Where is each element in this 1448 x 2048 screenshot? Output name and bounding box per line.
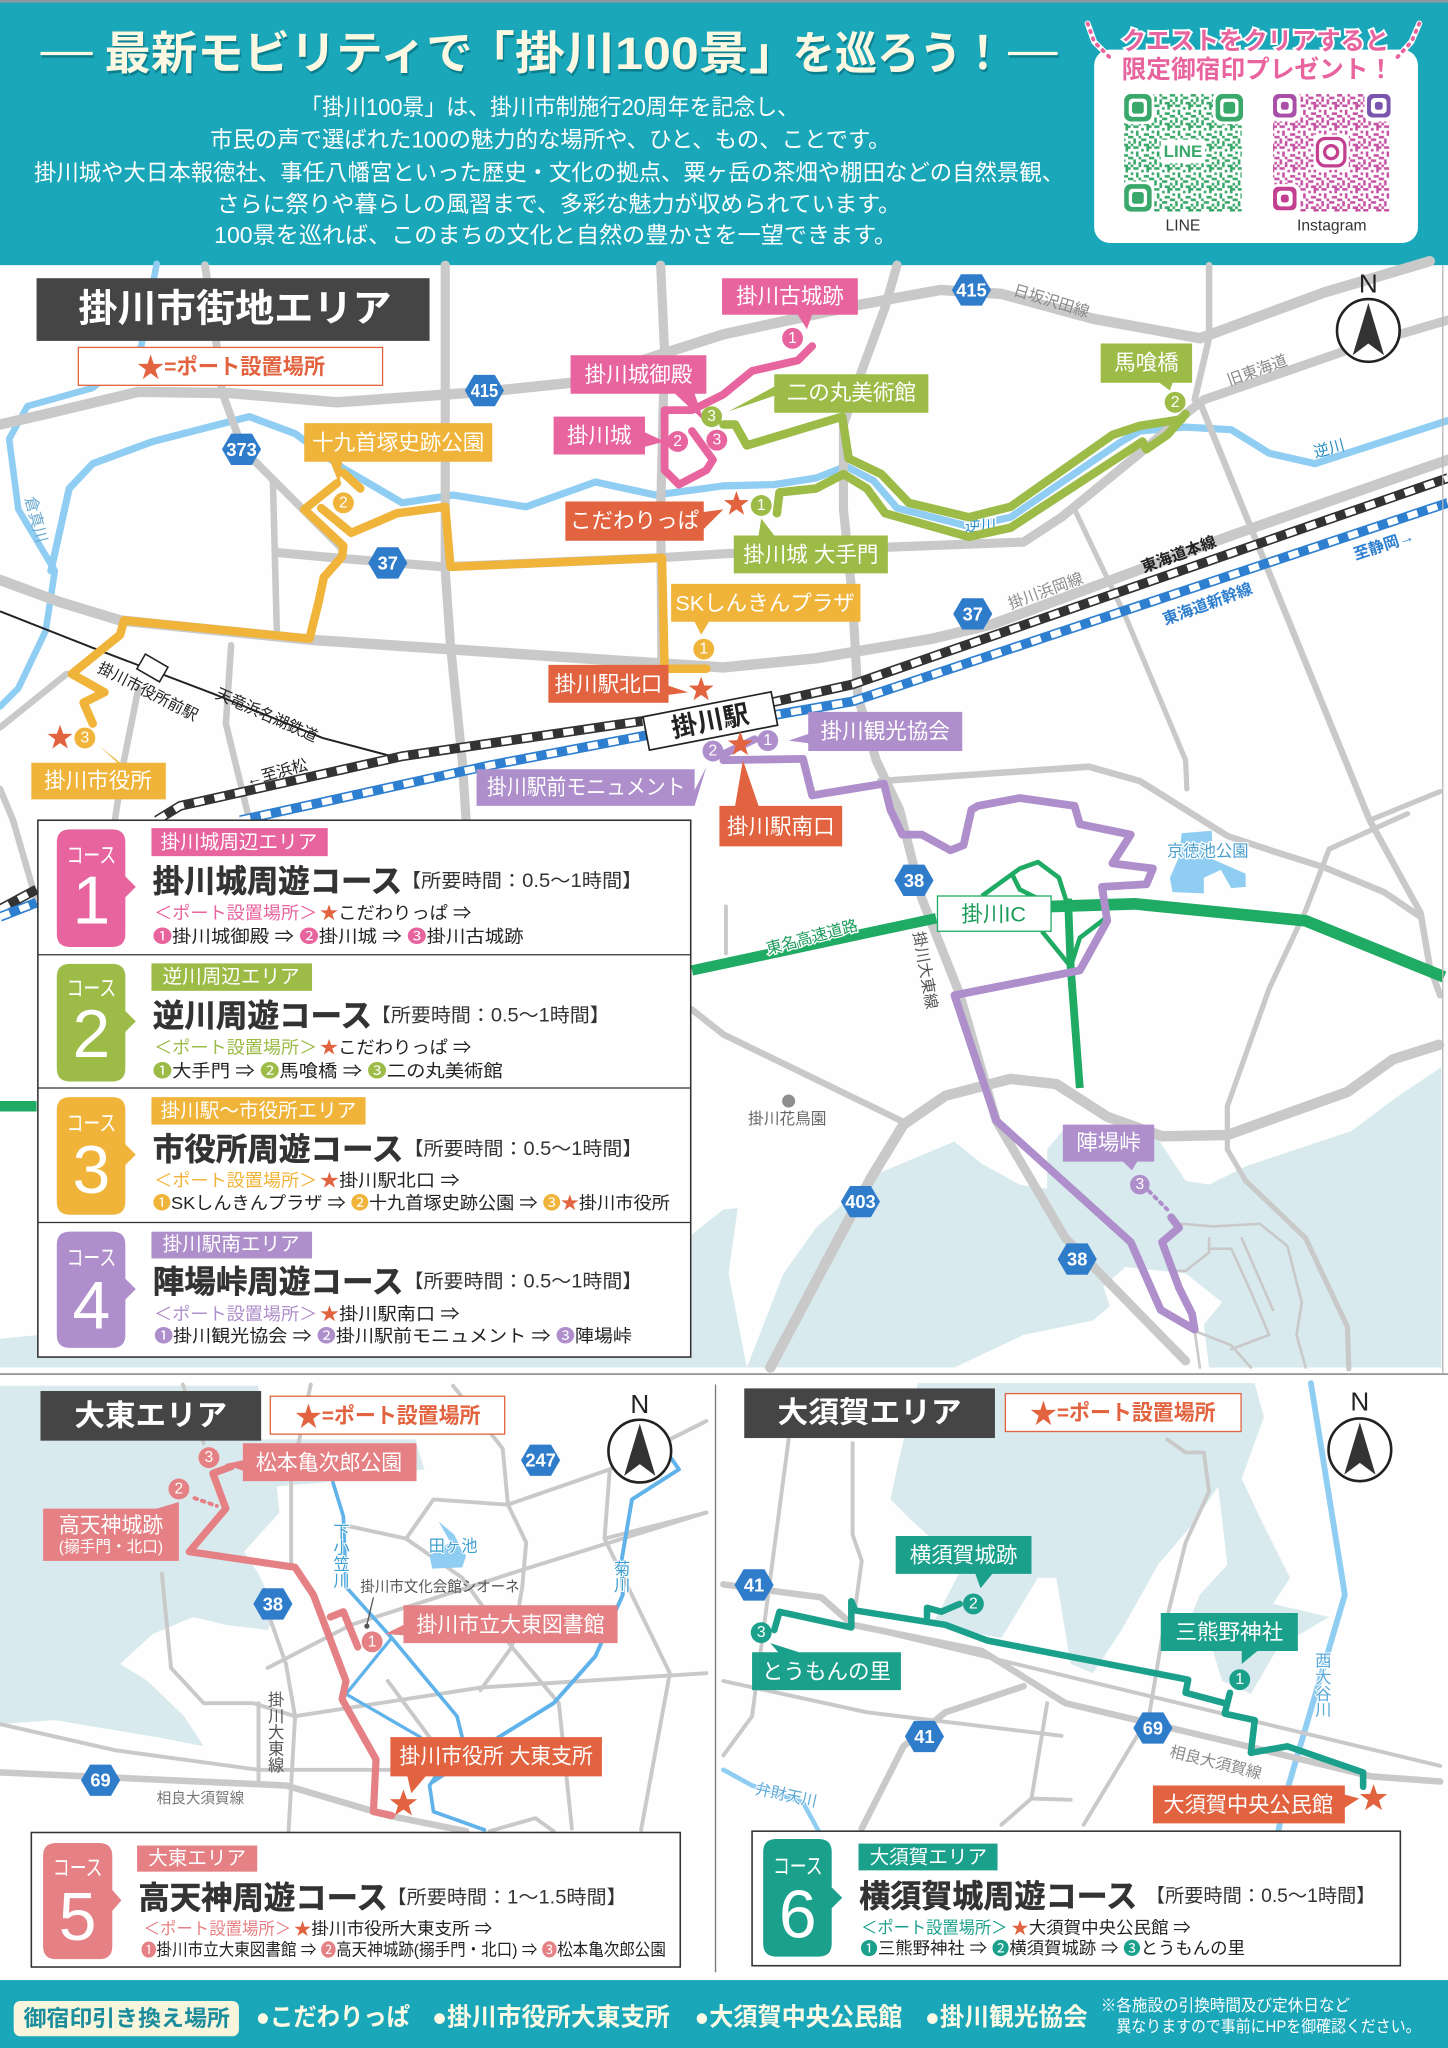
quest text xyxy=(1122,27,1393,84)
footer note xyxy=(1101,1997,1421,2036)
legend: Osuka xyxy=(1005,1394,1241,1432)
badge 1: コース xyxy=(67,843,116,868)
port 3 xyxy=(154,1171,460,1191)
text labels: 掛川市文化会館シオーネ xyxy=(360,1578,520,1595)
north compass: N xyxy=(1359,268,1378,298)
road number badges: 403 xyxy=(845,1191,876,1212)
road number badges: 37 xyxy=(963,603,983,624)
map: Kakegawa city area xyxy=(0,261,1448,1369)
Instagram QR code xyxy=(1270,91,1394,214)
footer band xyxy=(0,1980,1448,2048)
north compass xyxy=(608,1389,671,1482)
map text labels: 日坂沢田線 xyxy=(1011,281,1092,321)
route: course 5 xyxy=(189,1467,392,1816)
marker: yellow 3: 3 xyxy=(81,729,90,746)
label: 掛川市立大東図書館: 掛川市立大東図書館 xyxy=(417,1613,605,1637)
Kakegawa IC box: 掛川IC xyxy=(961,902,1026,926)
marker: pink 2 xyxy=(667,431,688,452)
label: とうもんの里 xyxy=(752,1643,901,1690)
port 4: ＜ポート設置場所＞ xyxy=(154,1304,317,1324)
railway: Tenryu Hamanako line xyxy=(0,611,646,756)
panel: QR card xyxy=(1088,24,1419,243)
marker: purple 3: 3 xyxy=(1136,1176,1144,1193)
north compass: N xyxy=(630,1389,649,1419)
stops 6: ❶三熊野神社 ⇒ ❷横須賀城跡 ⇒ ❸とうもんの里 xyxy=(860,1939,1245,1958)
marker: green 3: 3 xyxy=(707,408,716,425)
map text labels: ←至浜松 xyxy=(244,756,310,790)
label: こだわりっぱ xyxy=(565,502,723,541)
course 5 panel xyxy=(31,1832,680,1967)
text labels xyxy=(754,1652,1332,1811)
map text labels: 逆川 xyxy=(965,517,996,535)
port 6 xyxy=(861,1918,1191,1937)
title: を巡ろう！ xyxy=(793,28,1004,79)
route: course 6 xyxy=(774,1601,1363,1787)
footer items: ●こだわりっぱ xyxy=(256,2003,410,2031)
star: 掛川駅北口 xyxy=(689,677,714,700)
course 4 xyxy=(57,1232,642,1348)
road number badges: 38 xyxy=(263,1593,283,1614)
marker: yellow 2: 2 xyxy=(339,494,348,511)
label: 掛川駅南口 xyxy=(719,760,842,846)
legend: port marker: ★=ポート設置場所 xyxy=(137,352,325,383)
footer items: ●掛川市役所大東支所 xyxy=(432,2003,670,2031)
quest text: 限定御宿印プレゼント！ xyxy=(1122,55,1393,84)
roads xyxy=(723,1439,1440,1829)
footer note: 異なりますので事前にHPを御確認ください。 xyxy=(1116,2018,1421,2036)
course 2 xyxy=(57,963,610,1081)
badge 2 xyxy=(57,964,136,1081)
QR captions: LINE xyxy=(1166,217,1200,234)
label: SKしんきんプラザ: SKしんきんプラザ xyxy=(675,591,855,615)
label: 掛川市役所 大東支所 xyxy=(390,1737,602,1793)
port 1: ★こだわりっぱ ⇒ xyxy=(320,903,472,923)
label: 掛川市立大東図書館 xyxy=(385,1605,618,1643)
title: 「掛川100景」 xyxy=(465,28,799,79)
label: 三熊野神社: 三熊野神社 xyxy=(1175,1621,1283,1645)
port 4 xyxy=(154,1304,460,1324)
label: 馬喰橋 xyxy=(1101,344,1192,391)
rivers xyxy=(0,264,1448,893)
label: 掛川城 大手門 xyxy=(734,519,888,573)
area tag 5 xyxy=(137,1846,257,1872)
area tag 2 xyxy=(151,963,312,991)
marker: pink 3: 3 xyxy=(712,432,721,449)
area tag 1: 掛川城周辺エリア xyxy=(161,831,317,853)
port 1: ＜ポート設置場所＞ xyxy=(154,903,317,923)
badge 5: コース xyxy=(53,1855,102,1880)
marker: 3 xyxy=(198,1447,219,1468)
course title 4: 陣場峠周遊コース xyxy=(153,1264,403,1299)
map text labels: 掛川花鳥園 xyxy=(748,1110,826,1128)
label: 掛川城 大手門: 掛川城 大手門 xyxy=(743,543,878,567)
label: 掛川古城跡 xyxy=(722,278,858,329)
label: 松本亀次郎公園: 松本亀次郎公園 xyxy=(256,1451,402,1475)
text labels: 相良大須賀線 xyxy=(1168,1743,1264,1783)
label: 掛川駅北口 xyxy=(548,665,688,703)
quest text: クエストをクリアすると xyxy=(1122,27,1389,55)
footer items: ●掛川観光協会 xyxy=(925,2003,1088,2031)
label: 掛川観光協会: 掛川観光協会 xyxy=(821,719,950,743)
port 4: ★掛川駅南口 ⇒ xyxy=(320,1304,460,1324)
marker: pink 2: 2 xyxy=(673,433,682,450)
route: course 2 xyxy=(723,414,1186,537)
map text labels: 東海道新幹線 xyxy=(1160,579,1255,629)
port 6: ＜ポート設置場所＞ xyxy=(861,1918,1007,1937)
intro paragraph: 掛川城や大日本報徳社、事任八幡宮といった歴史・文化の拠点、粟ヶ岳の茶畑や棚田などの自然景観、 xyxy=(34,159,1064,185)
label: 二の丸美術館 xyxy=(729,374,928,413)
label: 陣場峠 xyxy=(1063,1125,1154,1170)
dotted walk xyxy=(195,1498,217,1506)
port 1 xyxy=(154,903,472,923)
label: 十九首塚史跡公園: 十九首塚史跡公園 xyxy=(312,431,484,455)
marker: yellow 1 xyxy=(693,639,714,660)
marker: yellow 1: 1 xyxy=(699,641,708,658)
intro paragraph: さらに祭りや暮らしの風習まで、多彩な魅力が収められています。 xyxy=(217,191,901,217)
label: 掛川駅前モニュメント xyxy=(477,767,706,806)
label: 高天神城跡: 高天神城跡 xyxy=(59,1514,163,1538)
label: こだわりっぱ: こだわりっぱ xyxy=(570,509,699,533)
marker: 2 xyxy=(168,1479,189,1499)
rivers xyxy=(723,1383,1345,1831)
port 6: ★大須賀中央公民館 ⇒ xyxy=(1011,1918,1191,1937)
star: 掛川市役所 xyxy=(48,725,72,749)
intro paragraph: 100景を巡れば、このまちの文化と自然の豊かさを一望できます。 xyxy=(214,222,897,248)
road number badges: 41 xyxy=(744,1574,764,1595)
stops 4: ❶掛川観光協会 ⇒ ❷掛川駅前モニュメント ⇒ ❸陣場峠 xyxy=(154,1326,632,1346)
badge 3: コース xyxy=(67,1111,116,1136)
stops 5: ❶掛川市立大東図書館 ⇒ ❷高天神城跡(搦手門・北口) ⇒ ❸松本亀次郎公園 xyxy=(141,1941,666,1960)
area tag 4: 掛川駅南エリア xyxy=(163,1234,300,1256)
footer items xyxy=(256,2003,1088,2031)
heading: Osuka xyxy=(744,1388,995,1438)
port 5 xyxy=(144,1920,492,1939)
map text labels: 倉真川 xyxy=(21,495,51,545)
marker: 3 xyxy=(751,1622,772,1643)
marker: 2 xyxy=(963,1593,984,1614)
badge 3: 3 xyxy=(73,1133,110,1208)
expressway xyxy=(0,862,1444,1106)
pond xyxy=(1170,831,1246,893)
badge 5: 5 xyxy=(59,1880,97,1955)
QR captions: Instagram xyxy=(1297,217,1367,234)
course title 6: 横須賀城周遊コース xyxy=(859,1879,1137,1914)
course title 1: 掛川城周遊コース xyxy=(153,864,402,899)
text labels: 菊川 xyxy=(611,1560,630,1593)
stops 3: ❶SKしんきんプラザ ⇒ ❷十九首塚史跡公園 ⇒ ❸★掛川市役所 xyxy=(153,1193,670,1213)
Kakegawa IC box xyxy=(937,896,1051,931)
route: course 3 xyxy=(72,473,706,724)
marker: 1 xyxy=(362,1631,383,1652)
port 2: ＜ポート設置場所＞ xyxy=(154,1038,317,1058)
marker: 1: 1 xyxy=(1235,1671,1244,1688)
badge 1: 1 xyxy=(73,864,110,939)
text labels: 田ヶ池 xyxy=(429,1537,478,1555)
title xyxy=(40,28,1058,79)
label: 高天神城跡 xyxy=(43,1502,179,1561)
label: 掛川駅北口: 掛川駅北口 xyxy=(555,672,662,696)
course 3 xyxy=(57,1097,670,1215)
marker: purple 3 xyxy=(1130,1175,1150,1194)
marker: yellow 3 xyxy=(74,728,95,748)
road number badges: 69 xyxy=(1143,1717,1163,1739)
road number badges: 373 xyxy=(226,439,257,460)
marker: 1: 1 xyxy=(368,1633,376,1650)
heading: city area xyxy=(37,278,430,341)
heading: Daito xyxy=(40,1391,261,1441)
label: 横須賀城跡: 横須賀城跡 xyxy=(910,1544,1017,1568)
area tag 6 xyxy=(858,1844,998,1870)
star: 大須賀中央公民館 xyxy=(1360,1784,1387,1810)
heading: city area: 掛川市街地エリア xyxy=(78,289,392,331)
legend: Daito: ★=ポート設置場所 xyxy=(295,1400,480,1431)
label: 大須賀中央公民館: 大須賀中央公民館 xyxy=(1163,1793,1333,1817)
map text labels: 京徳池公園 xyxy=(1167,843,1249,861)
road number badges xyxy=(734,1569,1173,1752)
marker: purple 2: 2 xyxy=(709,743,717,760)
marker: green 1: 1 xyxy=(757,497,766,514)
hills xyxy=(0,1067,1441,1368)
marker: pink 1: 1 xyxy=(788,330,797,347)
north compass xyxy=(1337,268,1400,362)
text labels: 西大谷川 xyxy=(1312,1652,1332,1718)
port 3: ＜ポート設置場所＞ xyxy=(154,1171,317,1191)
map text labels: 至静岡→ xyxy=(1351,527,1416,564)
time 2: 【所要時間：0.5～1時間】 xyxy=(371,1005,610,1027)
badge 5 xyxy=(43,1843,121,1959)
legend: port marker xyxy=(78,347,383,385)
roads xyxy=(0,261,1448,1369)
hills xyxy=(890,1383,1329,1694)
label: 十九首塚史跡公園 xyxy=(304,423,492,485)
badge 6: 6 xyxy=(779,1877,817,1952)
course 1 xyxy=(57,828,642,947)
map text labels xyxy=(21,281,1416,1128)
road number badges: 415 xyxy=(956,279,987,300)
intro paragraph: 「掛川100景」は、掛川市制施行20周年を記念し、 xyxy=(300,94,799,120)
port 3: ★掛川駅北口 ⇒ xyxy=(320,1171,460,1191)
port 5: ＜ポート設置場所＞ xyxy=(144,1920,291,1939)
badge 4: 4 xyxy=(73,1269,110,1344)
title: 最新モビリティで xyxy=(104,28,473,79)
badge 4: コース xyxy=(67,1245,116,1270)
course title 2: 逆川周遊コース xyxy=(153,999,372,1034)
badge 2: コース xyxy=(67,976,116,1001)
map text labels: 掛川浜岡線 xyxy=(1006,569,1086,613)
label: 大須賀中央公民館 xyxy=(1153,1785,1359,1823)
course 6 panel xyxy=(752,1831,1400,1966)
roads xyxy=(0,1384,706,1831)
marker: green 1 xyxy=(751,495,772,516)
label: 高天神城跡: (搦手門・北口) xyxy=(59,1538,163,1556)
marker: green 2 xyxy=(1165,392,1186,413)
area tag 1 xyxy=(151,828,328,856)
label: 掛川観光協会 xyxy=(789,712,962,751)
road number badges: 38 xyxy=(1067,1249,1087,1270)
road number badges: 247 xyxy=(525,1450,556,1471)
badge 1 xyxy=(57,829,136,947)
railway: Tokaido Shinkansen xyxy=(0,503,1448,917)
label: 掛川駅南口: 掛川駅南口 xyxy=(727,815,835,839)
map text labels: 逆川 xyxy=(1312,436,1347,462)
marker: purple 1: 1 xyxy=(763,732,772,749)
marker: green 2: 2 xyxy=(1171,394,1179,411)
label: SKしんきんプラザ xyxy=(671,584,860,635)
badge 2: 2 xyxy=(73,997,110,1072)
label: 掛川市役所 大東支所: 掛川市役所 大東支所 xyxy=(400,1745,593,1769)
map: Daito area xyxy=(0,1384,706,1967)
footer button: 御宿印引き換え場所 xyxy=(24,2006,230,2031)
label: 掛川市役所: 掛川市役所 xyxy=(44,769,152,793)
label: 三熊野神社 xyxy=(1161,1613,1298,1664)
railway: Tokaido main line xyxy=(0,478,1448,909)
label: 松本亀次郎公園 xyxy=(225,1443,417,1481)
map: Osuka area xyxy=(723,1383,1440,1966)
header band xyxy=(0,0,1448,265)
map text labels: 東名高速道路 xyxy=(764,916,860,958)
badge 6 xyxy=(763,1839,842,1957)
panel: course list xyxy=(38,820,691,1357)
map text labels: 東海道本線 xyxy=(1139,532,1219,576)
time 4: 【所要時間：0.5～1時間】 xyxy=(403,1270,642,1292)
area tag 3: 掛川駅～市役所エリア xyxy=(161,1100,356,1122)
north compass xyxy=(1329,1386,1391,1481)
label: 掛川城 xyxy=(554,417,665,455)
course title 5: 高天神周遊コース xyxy=(138,1880,388,1915)
pond xyxy=(430,1522,466,1569)
map text labels: 天竜浜名湖鉄道 xyxy=(213,685,321,746)
marker: 3: 3 xyxy=(757,1624,766,1641)
road number badges xyxy=(81,1445,560,1796)
badge 6: コース xyxy=(773,1854,823,1879)
area tag 2: 逆川周辺エリア xyxy=(163,966,300,988)
road number badges: 415 xyxy=(471,380,498,401)
map text labels: 掛川大東線 xyxy=(909,930,941,1011)
course title 3: 市役所周遊コース xyxy=(153,1132,403,1167)
area tag 5: 大東エリア xyxy=(148,1848,246,1870)
station box xyxy=(643,692,778,750)
intro paragraph: 市民の声で選ばれた100の魅力的な場所や、ひと、もの、ことです。 xyxy=(210,127,890,153)
time 6: 【所要時間：0.5～1時間】 xyxy=(1146,1885,1376,1907)
road number badges: 41 xyxy=(914,1726,935,1747)
text labels: 弁財天川 xyxy=(754,1780,819,1811)
intro paragraph xyxy=(34,94,1064,248)
text labels: 下小笠川 xyxy=(330,1523,350,1588)
rivers xyxy=(333,1456,679,1830)
marker: pink 3 xyxy=(706,430,727,451)
label: とうもんの里: とうもんの里 xyxy=(762,1660,891,1684)
label: 掛川古城跡: 掛川古城跡 xyxy=(736,284,844,308)
stops 1: ❶掛川城御殿 ⇒ ❷掛川城 ⇒ ❸掛川古城跡 xyxy=(153,926,524,946)
time 1: 【所要時間：0.5～1時間】 xyxy=(401,870,642,892)
map text labels: 掛川市役所前駅 xyxy=(95,659,201,725)
marker: pink 1 xyxy=(782,328,803,349)
port 2 xyxy=(154,1038,472,1058)
label: 掛川城御殿 xyxy=(571,355,706,421)
marker: yellow 2 xyxy=(333,492,354,513)
LINE QR code xyxy=(1122,91,1246,214)
spot labels xyxy=(31,278,1192,1194)
LINE QR code: LINE xyxy=(1164,142,1202,161)
marker: purple 1 xyxy=(757,730,778,751)
port 2: ★こだわりっぱ ⇒ xyxy=(320,1038,472,1058)
north compass: N xyxy=(1350,1386,1369,1416)
QR captions xyxy=(1166,217,1367,234)
port 5: ★掛川市役所大東支所 ⇒ xyxy=(294,1920,492,1939)
road number badges: 38 xyxy=(904,870,924,891)
text labels: 相良大須賀線 xyxy=(157,1790,244,1807)
marker: purple 2 xyxy=(702,741,723,761)
heading: Daito: 大東エリア xyxy=(74,1399,227,1432)
badge 3 xyxy=(57,1097,136,1215)
marker: 2: 2 xyxy=(175,1480,183,1497)
legend: Daito xyxy=(270,1396,505,1434)
label: 横須賀城跡 xyxy=(896,1536,1031,1588)
time 3: 【所要時間：0.5～1時間】 xyxy=(403,1138,642,1160)
road number badges xyxy=(222,274,1097,1275)
footer note: ※各施設の引換時間及び定休日など xyxy=(1101,1997,1350,2015)
text labels: 掛川大東線 xyxy=(265,1691,284,1773)
heading: Osuka: 大須賀エリア xyxy=(778,1397,962,1430)
star: 大東支所 xyxy=(390,1789,417,1815)
footer button xyxy=(14,2001,239,2036)
text labels xyxy=(157,1523,630,1807)
hills xyxy=(0,1386,424,1746)
badge 4 xyxy=(57,1232,136,1348)
label: 二の丸美術館: 二の丸美術館 xyxy=(787,381,916,405)
label: 掛川市役所 xyxy=(31,746,166,799)
marker: green 3 xyxy=(701,406,722,427)
time 5: 【所要時間：1～1.5時間】 xyxy=(386,1886,627,1908)
legend: Osuka: ★=ポート設置場所 xyxy=(1030,1398,1216,1429)
route: course 1 xyxy=(665,346,812,485)
marker: 2: 2 xyxy=(969,1595,978,1612)
footer items: ●大須賀中央公民館 xyxy=(695,2003,902,2031)
road number badges: 37 xyxy=(378,552,398,573)
route: course 4 xyxy=(723,739,1195,1330)
stops 2: ❶大手門 ⇒ ❷馬喰橋 ⇒ ❸二の丸美術館 xyxy=(153,1061,503,1081)
marker: 3: 3 xyxy=(205,1449,214,1466)
label: 掛川駅前モニュメント: 掛川駅前モニュメント xyxy=(487,776,685,800)
star: 掛川駅南口 xyxy=(728,731,753,755)
label: 馬喰橋: 馬喰橋 xyxy=(1114,351,1179,375)
area tag 6: 大須賀エリア xyxy=(870,1846,987,1868)
station box: 掛川駅 xyxy=(669,699,752,743)
road number badges: 69 xyxy=(90,1770,111,1791)
marker: 1 xyxy=(1229,1669,1250,1690)
label: 掛川城: 掛川城 xyxy=(567,424,632,448)
label: 陣場峠: 陣場峠 xyxy=(1076,1131,1141,1155)
map text labels: 旧東海道 xyxy=(1225,351,1290,390)
label: 掛川城御殿: 掛川城御殿 xyxy=(585,363,692,387)
star: こだわりっぱ xyxy=(724,491,749,515)
